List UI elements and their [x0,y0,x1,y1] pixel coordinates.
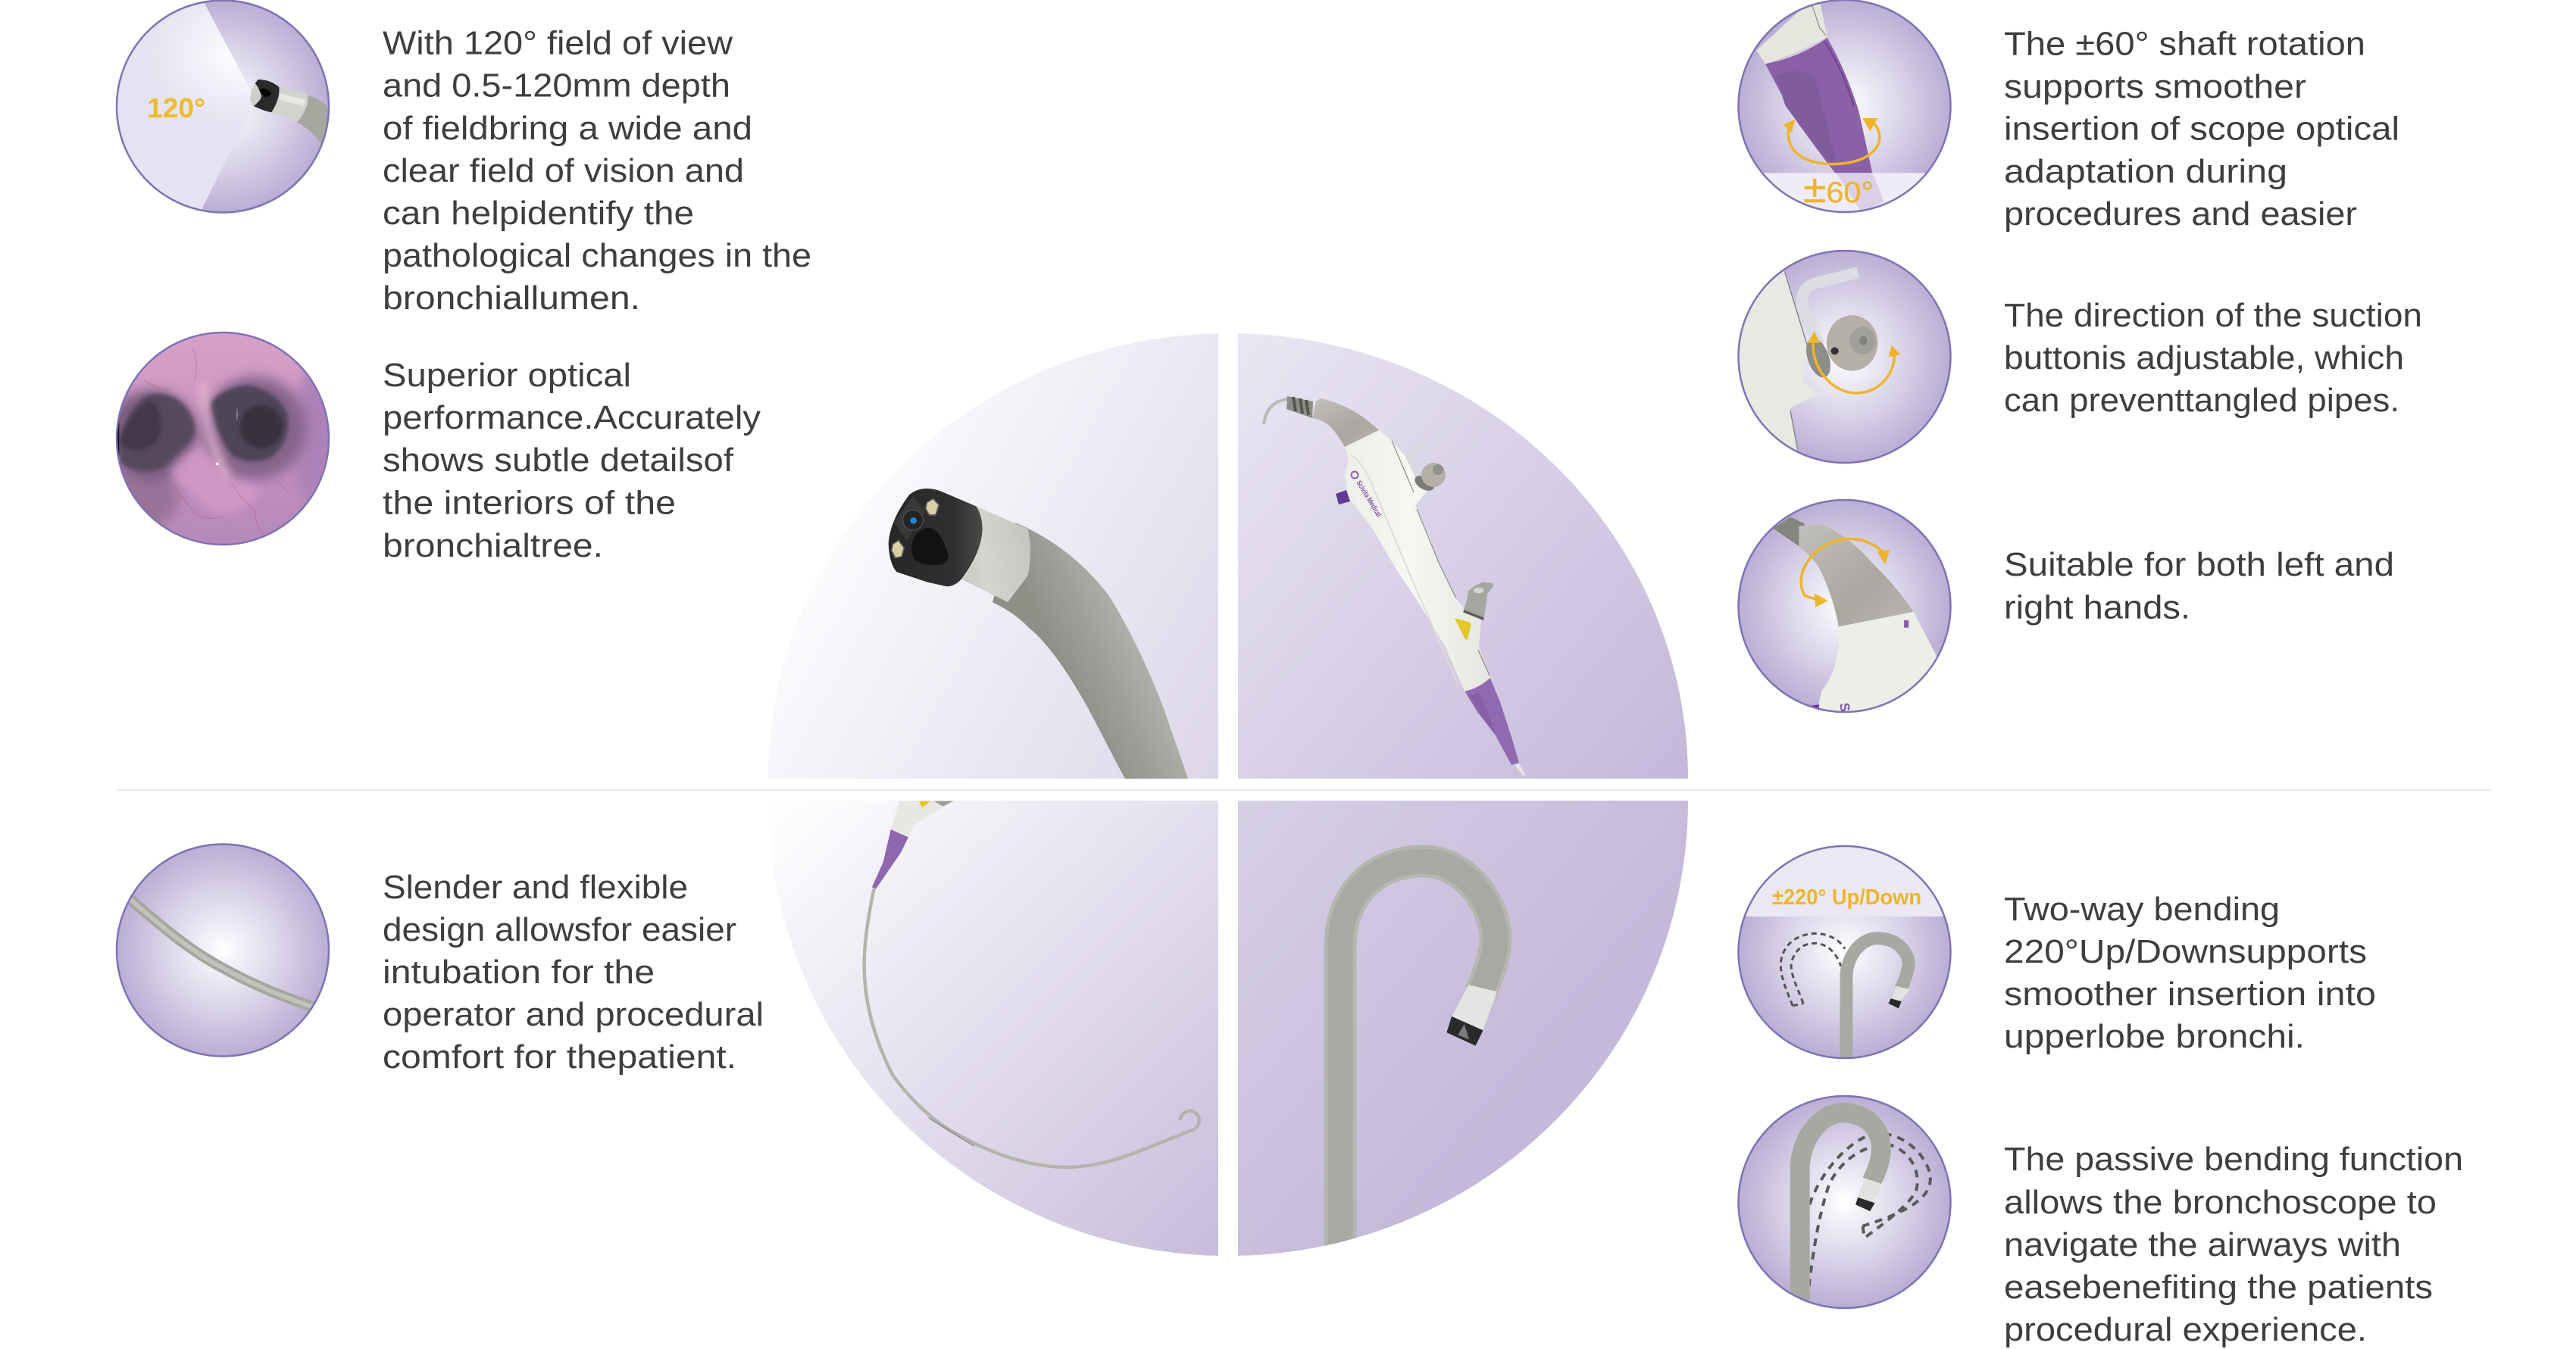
text: passive bending: procedural experience. [2004,1311,2367,1348]
feature: passive bending [1738,1096,2463,1348]
handle boot [1312,398,1379,447]
text: shaft rotation: The ±60° shaft rotation [2004,26,2365,62]
text: field of view: clear field of vision and [383,152,744,189]
text: field of view: With 120° field of view [383,24,733,62]
text: field of view: can helpidentify the [383,195,694,232]
text: two-way bending [2004,891,2376,1055]
side port [1455,582,1526,776]
suction knob [1421,463,1446,487]
icon: slender shaft circle [117,844,329,1056]
text: both hands [2004,546,2394,626]
text: optical performance [383,357,761,564]
text: optical performance: the interiors of the [383,485,676,521]
insertion cord [864,889,1199,1167]
text: both hands: right hands. [2004,589,2190,626]
label: plus minus 60: ±60° [1803,167,1874,211]
text: optical performance: Superior optical [383,357,631,394]
text: slender design [383,869,764,1076]
feature: adjustable suction button [1727,251,2422,468]
icon: handle boot circle: Sci [1837,701,1855,723]
icon: passive bending circle [1738,1096,1950,1310]
quadrant: full length scope [768,801,1218,1256]
text: two-way bending: smoother insertion into [2004,976,2376,1013]
brand text: Scivita Medical [1354,479,1383,519]
text: two-way bending: Two-way bending [2004,891,2280,928]
text: field of view: pathological changes in the [383,237,811,274]
feature: two-way bending [1735,841,2376,1060]
feature: slender and flexible [117,844,764,1076]
icon: up down bending circle [1735,841,1955,1060]
text: slender design: intubation for the [383,954,655,991]
text: slender design: Slender and flexible [383,869,688,906]
suction tube [1408,444,1428,475]
text: shaft rotation: insertion of scope optical [2004,111,2399,147]
text: optical performance: bronchialtree. [383,527,603,564]
text: optical performance: shows subtle detailsof [383,442,734,479]
feature: 120 degree field of view [106,0,811,317]
text: passive bending: The passive bending function [2004,1141,2463,1178]
text: two-way bending: 220°Up/Downsupports [2004,933,2367,970]
yellow marker [1455,618,1471,640]
text: slender design: comfort for thepatient. [383,1038,736,1076]
text: suction button: The direction of the suction [2004,297,2422,334]
text: both hands: Suitable for both left and [2004,546,2394,583]
text: field of view: bronchiallumen. [383,279,640,317]
quadrant: bending section [1238,801,1688,1265]
icon: suction button circle [1727,251,1950,468]
icon: handle boot circle [1738,500,1950,723]
text: suction button: can preventtangled pipes. [2004,382,2399,419]
feature: left and right hands [1738,500,2394,723]
quadrant: scope tip close-up [768,333,1218,779]
text: suction button: buttonis adjustable, which [2004,339,2404,376]
cable [1264,399,1288,424]
icon: endoscopic bronchial photo [115,332,330,545]
text: slender design: operator and procedural [383,996,764,1033]
purple cone [1465,678,1519,765]
text: optical performance: performance.Accurately [383,399,761,436]
lever [1336,490,1350,504]
suction collar [1412,473,1436,494]
text: field of view: of fieldbring a wide and [383,110,752,147]
text: suction button [2004,297,2422,419]
text: field of view [383,24,811,317]
text: slender design: design allowsfor easier [383,911,736,948]
feature: superior optical performance [104,329,761,564]
text: shaft rotation: supports smoother [2004,68,2306,105]
icon: shaft rotation circle [1735,0,1955,220]
distal tip [1515,763,1526,776]
icon: field of view circle [106,0,330,212]
feature: shaft rotation [1735,0,2399,233]
brand mark [1352,471,1358,479]
text: passive bending: navigate the airways with [2004,1226,2401,1263]
text: shaft rotation: procedures and easier [2004,195,2357,233]
label: up down 220: ±220° Up/Down [1772,885,1921,910]
text: field of view: and 0.5-120mm depth [383,67,730,105]
quadrant: handle [1238,333,1688,779]
text: passive bending [2004,1141,2463,1348]
label: 120 degrees: 120° [147,92,205,123]
panel: central product quadrants [768,333,1688,1265]
text: shaft rotation: adaptation during [2004,153,2287,190]
text: two-way bending: upperlobe bronchi. [2004,1018,2305,1055]
handle body [1345,430,1490,692]
text: shaft rotation [2004,26,2399,233]
text: passive bending: allows the bronchoscope to [2004,1184,2437,1221]
text: passive bending: easebenefiting the patients [2004,1269,2433,1306]
